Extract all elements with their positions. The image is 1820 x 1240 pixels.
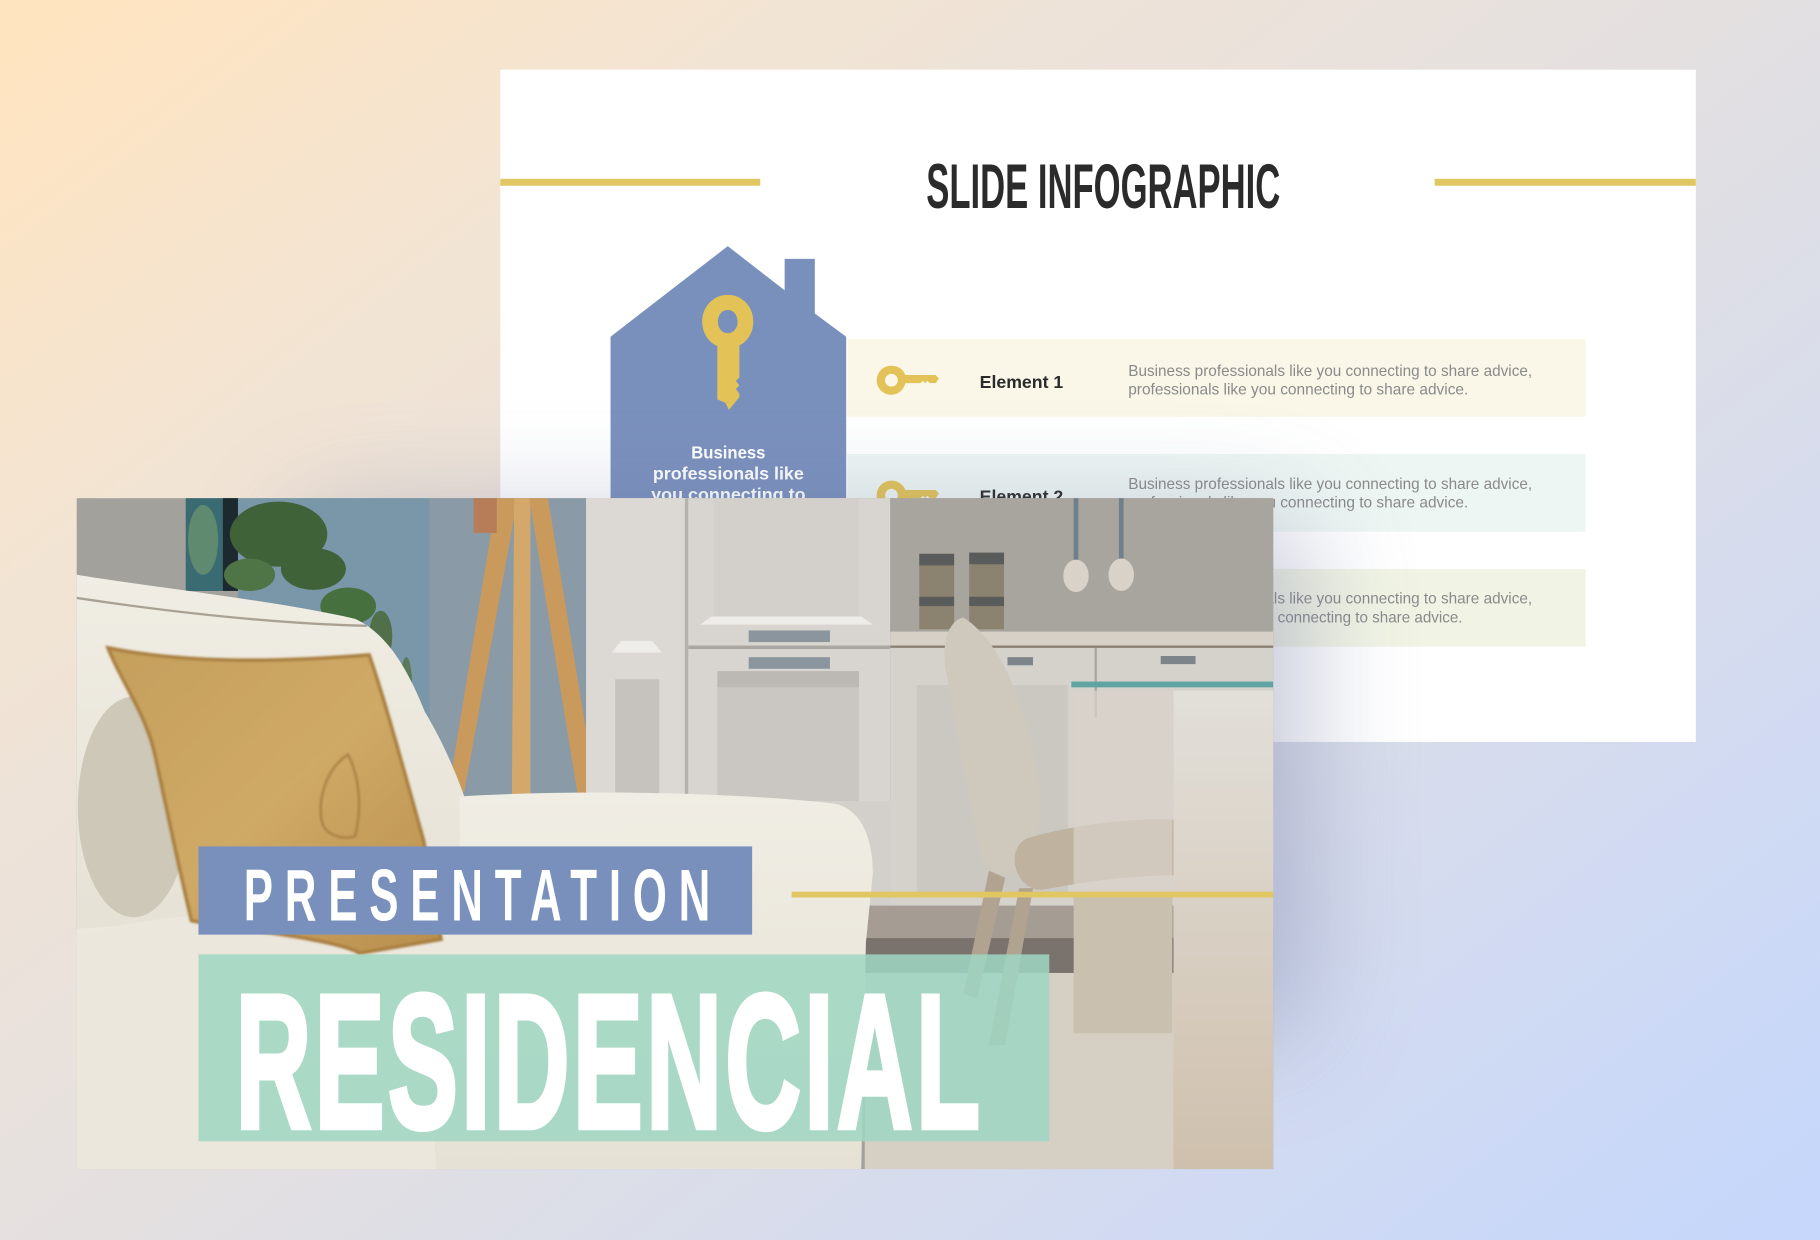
description [1128, 363, 1532, 399]
photo drop shadow [302, 522, 1300, 1033]
panel: slide infographic [500, 70, 1696, 742]
icon: small key [877, 481, 939, 510]
photo: gold cushion [108, 648, 441, 953]
jars [919, 553, 1004, 629]
photo: wall and window [77, 498, 1273, 1169]
description: professionals like you connecting to share advice. [1128, 382, 1468, 399]
row: element 3 [847, 569, 1586, 647]
description: professionals like you connecting to share advice. [1128, 494, 1468, 511]
description: Business professionals like you connecting to share advice, [1128, 476, 1532, 493]
subtitle block [198, 846, 752, 936]
title block [198, 954, 1050, 1142]
description: Business professionals like you connecting to share advice, [1128, 363, 1532, 380]
icon: large key [702, 295, 753, 410]
photo: backsplash and counter [890, 498, 1273, 927]
house description text: you connecting to [651, 484, 806, 504]
description: professionals like you connecting to share advice. [1128, 609, 1463, 626]
hanging utensils [1074, 498, 1124, 562]
row: element 1 [847, 339, 1586, 417]
panel: interior photo cover [77, 498, 1273, 1169]
photo: floor and rug [864, 906, 1174, 1169]
house shape with key [611, 246, 846, 546]
slide title: SLIDE INFOGRAPHIC [926, 152, 1280, 222]
photo: wooden tripod lamp [452, 498, 586, 794]
slide accent lines [500, 179, 1696, 186]
photo: chair [944, 618, 1174, 954]
house description text: Business [691, 443, 765, 463]
accent line [792, 892, 1273, 897]
photo: glass table [1071, 682, 1273, 1169]
house description text: professionals like [653, 464, 804, 484]
title text: RESIDENCIAL [236, 955, 980, 1168]
label: Element 2 [980, 487, 1063, 507]
description [1128, 591, 1532, 626]
row: element 2 [847, 454, 1586, 532]
photo: sofa [77, 575, 873, 1169]
photo: plant [188, 502, 412, 683]
subtitle text: PRESENTATION [244, 854, 710, 936]
description: Business professionals like you connecting to share advice, [1128, 591, 1532, 608]
photo: kitchen cabinets [586, 498, 891, 940]
label: Element 1 [980, 372, 1064, 392]
house description text [651, 443, 806, 504]
icon: small key [877, 366, 939, 395]
description [1128, 476, 1532, 511]
